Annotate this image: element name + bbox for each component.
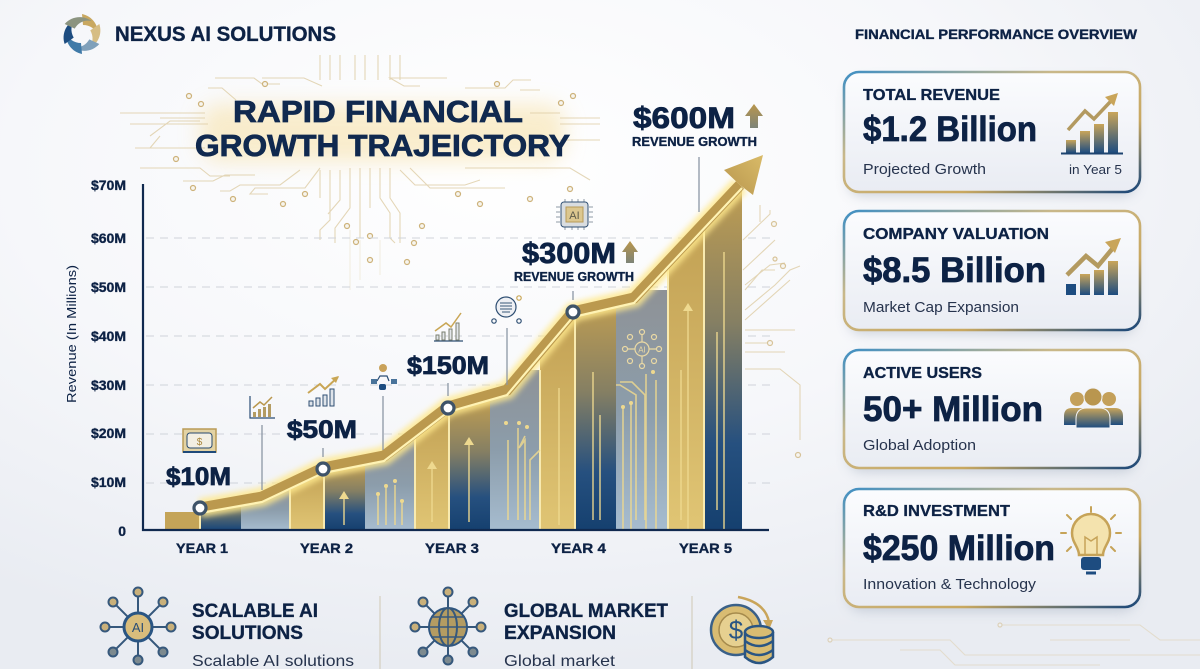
icon: light bulb (1061, 507, 1121, 573)
heading: financial performance overview: FINANCIAL PERFORMANCE OVERVIEW (855, 27, 1137, 42)
callout: $300M: REVENUE GROWTH (514, 270, 634, 284)
card note: Projected Growth (863, 161, 986, 178)
x axis labels: YEAR 5 (679, 540, 732, 556)
icon: swirl logo (57, 10, 107, 58)
y axis labels: $60M (91, 230, 126, 246)
grid lines (146, 238, 770, 483)
callout: $600M (632, 102, 763, 149)
growth line glow (200, 185, 740, 508)
callout: $300M: $300M (522, 238, 616, 270)
panel: company valuation (844, 211, 1140, 334)
card note: Market Cap Expansion (863, 299, 1019, 316)
y axis labels: $20M (91, 425, 126, 441)
bottom right circuit decoration (828, 623, 1200, 665)
arrow head (724, 155, 763, 195)
title with circuit glow: GROWTH TRAJEICTORY (195, 128, 570, 163)
feature: scalable AI solutions (100, 588, 354, 669)
x axis labels (176, 540, 732, 556)
title circuit traces (120, 55, 600, 290)
feature divider (380, 596, 692, 669)
axes (143, 184, 769, 530)
card label: TOTAL REVENUE (863, 87, 1000, 104)
card value: 50+ Million (863, 390, 1043, 429)
bar dividers (200, 220, 704, 530)
y axis labels (91, 177, 126, 539)
callout: $150M: $150M (407, 352, 489, 380)
icon: dollar bill: $ (197, 437, 203, 448)
growth line highlight (200, 188, 742, 513)
bar circuit lines and arrows (344, 252, 724, 530)
feature heading: GLOBAL MARKET (504, 601, 668, 622)
feature: global market expansion (410, 588, 668, 669)
icon: globe network (410, 588, 486, 664)
feature: global market expansion: EXPANSION (504, 623, 616, 644)
callout: $10M: $10M (166, 463, 231, 491)
y axis labels: $10M (91, 474, 126, 490)
title glow (200, 104, 565, 162)
icon: network document (492, 296, 521, 323)
y axis labels: $40M (91, 328, 126, 344)
icon: AI hub inside bar: AI (638, 346, 646, 354)
feature heading: SCALABLE AI (192, 601, 318, 622)
card note right: in Year 5 (1069, 162, 1122, 177)
card value: $1.2 Billion (863, 110, 1037, 149)
icon: dollar bill (183, 429, 216, 452)
callout: $300M (514, 238, 638, 284)
y axis title: Revenue (In Millions) (64, 265, 79, 403)
icon: AI chip: AI (569, 210, 580, 222)
x axis labels: YEAR 1 (176, 540, 228, 556)
panel: R&D investment (844, 489, 1140, 611)
icon: small bar chart (250, 396, 275, 418)
callout: $600M: REVENUE GROWTH (632, 135, 757, 149)
growth line (200, 185, 740, 508)
y axis labels: $30M (91, 377, 126, 393)
card note: Innovation & Technology (863, 576, 1037, 593)
revenue chart (64, 102, 770, 556)
card label: COMPANY VALUATION (863, 226, 1049, 243)
panel: total revenue (844, 72, 1140, 196)
card label: R&D INVESTMENT (863, 503, 1010, 520)
icon: person network (371, 364, 397, 390)
icon: AI hub (100, 588, 176, 664)
logo: Nexus AI Solutions (57, 10, 336, 58)
card value: $8.5 Billion (863, 251, 1046, 290)
callout: $50M: $50M (287, 416, 357, 444)
panel: active users (844, 350, 1140, 472)
data point markers (194, 306, 579, 514)
brand name: NEXUS AI SOLUTIONS (115, 23, 336, 46)
title with circuit glow (120, 55, 600, 290)
card value: $250 Million (863, 529, 1055, 568)
icon: coin and database (711, 597, 773, 663)
card note: Global Adoption (863, 437, 976, 454)
right side circuit decoration (743, 205, 800, 458)
icon: AI hub inside bar (622, 330, 662, 368)
icon: users (1064, 388, 1123, 428)
icon: growth chart (1066, 238, 1121, 295)
y axis labels: $50M (91, 279, 126, 295)
icon: AI hub: AI (132, 620, 144, 635)
y axis labels: 0 (118, 523, 126, 539)
leader lines (262, 157, 699, 490)
x axis labels: YEAR 3 (425, 540, 479, 556)
feature: scalable AI solutions: SOLUTIONS (192, 623, 303, 644)
title text: RAPID FINANCIAL (233, 94, 523, 129)
icon: AI chip (556, 199, 593, 230)
y axis labels: $70M (91, 177, 126, 193)
x axis labels: YEAR 2 (300, 540, 353, 556)
icon: growth chart (1061, 93, 1123, 154)
revenue bars (165, 185, 742, 530)
icon: coin and database: $ (729, 615, 744, 645)
icon: chart year 2 (308, 376, 339, 406)
icon: chart year 3 (434, 313, 463, 341)
x axis labels: YEAR 4 (551, 540, 606, 556)
card label: ACTIVE USERS (863, 365, 982, 382)
callout: $600M: $600M (633, 102, 735, 135)
